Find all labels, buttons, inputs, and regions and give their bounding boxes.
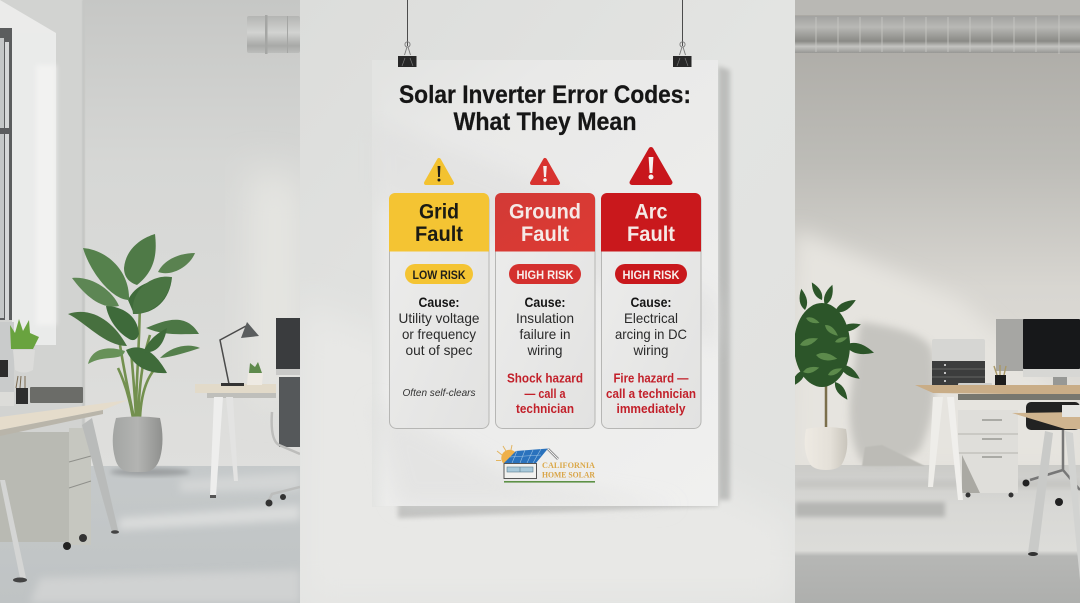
icon: red warning triangle (532, 160, 558, 183)
tall potted plant (68, 234, 200, 418)
hanging clip right (673, 0, 692, 67)
cause text: arc fault: arcing in DC (615, 326, 687, 342)
panel: arc fault (601, 193, 701, 428)
left office scene (0, 0, 300, 603)
icon: large red warning triangle (632, 150, 670, 182)
risk badge: low: LOW RISK (412, 268, 466, 282)
cause text: ground fault: Cause: (524, 294, 566, 310)
logo: California Home Solar (496, 445, 595, 483)
plant shadow on wall (850, 322, 935, 464)
panel header: grid fault (389, 193, 489, 252)
cause text: ground fault: failure in (520, 326, 570, 342)
window sill plant (10, 319, 39, 372)
air duct right (795, 15, 1080, 54)
cause text: ground fault: Insulation (516, 310, 574, 326)
warning: ground fault: — call a (524, 387, 566, 401)
panel: ground fault (495, 193, 595, 428)
warning: ground fault: technician (516, 402, 574, 416)
panel header: ground fault: Ground (509, 200, 581, 224)
cause text: arc fault: wiring (633, 342, 668, 358)
hanging clip left (398, 0, 416, 67)
back desk and cabinet (915, 385, 1080, 500)
note: grid fault: Often self-clears (402, 387, 476, 399)
poster shadow (398, 66, 730, 518)
logo: California Home Solar: CALIFORNIA (542, 461, 595, 470)
cause text: arc fault: Electrical (624, 310, 678, 326)
logo: California Home Solar: HOME SOLAR (542, 470, 595, 480)
cause text: arc fault (615, 294, 687, 358)
panel header: arc fault: Arc (634, 200, 668, 224)
warning: ground fault: Shock hazard (507, 372, 583, 386)
risk badge: high: HIGH RISK (622, 268, 680, 282)
window frame (0, 28, 12, 320)
icon: yellow warning triangle (426, 160, 452, 183)
title (399, 81, 691, 136)
panel header: grid fault: Grid (419, 200, 459, 224)
small desk with lamp and plant (195, 322, 276, 498)
warning: arc fault: immediately (616, 402, 686, 416)
warning: arc fault (606, 372, 696, 416)
risk badge: high (509, 264, 581, 284)
office chair (1022, 402, 1080, 506)
panel header: grid fault: Fault (415, 223, 463, 246)
panel: grid fault (389, 193, 489, 428)
fiddle leaf plant (795, 282, 874, 427)
warning: arc fault: call a technician (606, 387, 696, 401)
cause text: grid fault: Utility voltage (398, 310, 480, 326)
cause text: grid fault: Cause: (418, 294, 460, 310)
white plant pot (805, 427, 847, 470)
warning: ground fault (507, 372, 583, 416)
front desk (1012, 405, 1080, 580)
monitor and chair (266, 318, 300, 506)
air duct left (247, 15, 300, 54)
warning: arc fault: Fire hazard — (614, 372, 689, 386)
cause text: grid fault: or frequency (402, 326, 476, 342)
panel header: ground fault (495, 193, 595, 252)
panel header: ground fault: Fault (521, 223, 569, 246)
title: Solar Inverter Error Codes: (399, 81, 691, 109)
concrete pot (113, 416, 162, 472)
right office scene (788, 0, 1080, 603)
cause text: grid fault (398, 294, 480, 358)
panel header: arc fault (601, 193, 701, 252)
title: What They Mean (454, 108, 636, 136)
risk badge: high (615, 264, 687, 284)
printer (932, 339, 985, 386)
cause text: ground fault: wiring (527, 342, 562, 358)
cause text: grid fault: out of spec (406, 342, 472, 358)
poster (372, 0, 718, 507)
central wall panel (397, 66, 732, 519)
risk badge: low (405, 264, 473, 284)
cause text: arc fault: Cause: (630, 294, 672, 310)
risk badge: high: HIGH RISK (516, 268, 574, 282)
cause text: ground fault (516, 294, 574, 358)
panel header: arc fault: Fault (627, 223, 675, 246)
left desk with cabinet (0, 322, 128, 582)
monitors and pen cup (958, 319, 1080, 389)
